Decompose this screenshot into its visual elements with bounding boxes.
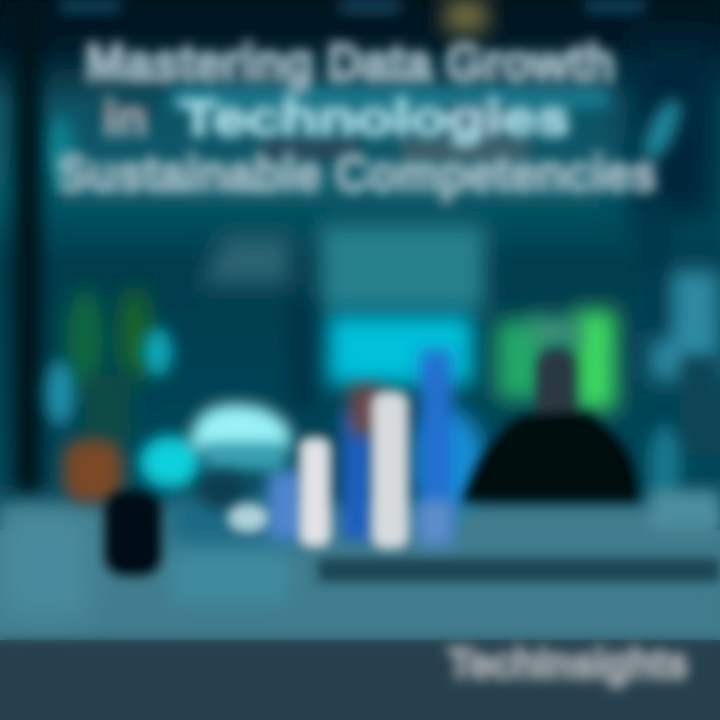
person silhouette <box>462 350 638 502</box>
green panel <box>496 310 616 410</box>
left pillar <box>14 0 42 495</box>
dark pot <box>104 490 162 576</box>
title: Mastering Data Growth <box>85 33 615 93</box>
desk edge <box>318 558 720 582</box>
footer logo text: TechInsights <box>448 639 688 688</box>
bar chart columns <box>268 385 452 548</box>
floor <box>0 490 720 640</box>
terracotta pot <box>64 440 122 502</box>
footer band <box>0 640 720 720</box>
title: Sustainable Competencies <box>57 145 657 203</box>
plant leaves <box>46 287 172 445</box>
central screen <box>328 315 484 540</box>
title: Technologies <box>180 90 570 146</box>
background wall <box>0 0 720 530</box>
title band shading <box>100 88 610 160</box>
title: in <box>102 90 148 146</box>
title <box>57 33 657 203</box>
cloud icon <box>140 404 290 532</box>
